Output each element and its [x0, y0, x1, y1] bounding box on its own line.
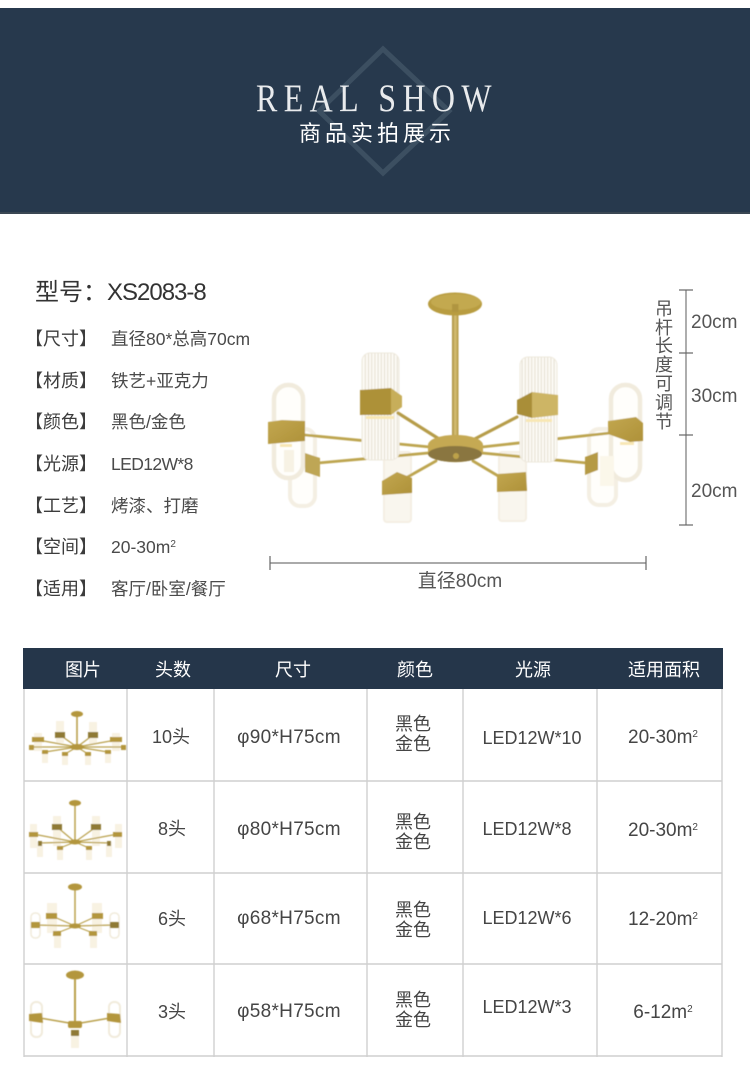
gold lamp holders [268, 388, 643, 495]
spec: finish [25, 496, 198, 516]
row: 6 heads: 金色 [395, 920, 431, 940]
row: 10 heads: 2 [692, 729, 698, 740]
row: 6 heads: 12-20m [628, 909, 692, 930]
row: 6 heads: 黑色 [395, 900, 431, 920]
spec: size: 直径80*总高70cm [111, 329, 250, 349]
spec: suitable rooms [25, 579, 226, 599]
cells: 10头 [152, 727, 190, 747]
label: adjustable rod: 节 [655, 412, 673, 432]
cells: 8头 [158, 819, 186, 839]
label: adjustable rod: 杆 [655, 318, 673, 338]
lamp inner highlights [284, 450, 614, 486]
spec: color: 【颜色】 [25, 412, 97, 432]
table header: 颜色 [397, 660, 433, 680]
row: 10 heads [29, 711, 698, 765]
central hub [428, 435, 483, 462]
spec: space [25, 537, 176, 557]
spec: color: 黑色/金色 [111, 412, 186, 432]
row: 10 heads: LED12W*10 [482, 728, 582, 748]
warm glow under holders [280, 416, 634, 447]
label: 20cm top: 20cm [691, 312, 737, 333]
spec: material: 铁艺+亚克力 [111, 371, 209, 391]
label: adjustable rod: 度 [655, 355, 673, 375]
cells: 3头 [158, 1002, 186, 1022]
label: adjustable rod [655, 299, 673, 432]
spec: space: 【空间】 [25, 537, 97, 557]
row: 8 heads: LED12W*8 [482, 819, 572, 839]
row: 8 heads: 20-30m [628, 820, 692, 841]
row: 8 heads: 金色 [395, 832, 431, 852]
banner: real show [0, 8, 750, 214]
model heading: 型号：XS2083-8 [35, 279, 206, 306]
banner subtitle: 商品实拍展示 [299, 121, 455, 146]
label: diameter 80cm: 直径80cm [418, 570, 502, 592]
row: 3 heads [29, 970, 693, 1048]
spec: light source: LED12W*8 [111, 454, 193, 474]
row: 6 heads: LED12W*6 [482, 908, 572, 928]
icon: diamond outline [319, 49, 449, 173]
row: 10 heads: 黑色 [395, 714, 431, 734]
spec: space: 2 [170, 539, 176, 550]
row: 6 heads [31, 884, 698, 948]
row: 3 heads: φ58*H75cm [237, 1001, 341, 1022]
row: 10 heads: 金色 [395, 734, 431, 754]
spec: light source [25, 454, 193, 474]
row: 6 heads: 2 [692, 911, 698, 922]
label: 30cm: 30cm [691, 386, 737, 407]
spec: color [25, 412, 186, 432]
spec: finish: 【工艺】 [25, 496, 97, 516]
label: adjustable rod: 吊 [655, 299, 673, 319]
spec: suitable rooms: 【适用】 [25, 579, 97, 599]
row: 3 heads: 金色 [395, 1010, 431, 1030]
row: 3 heads: LED12W*3 [482, 997, 572, 1017]
table header: 图片 [65, 660, 101, 680]
upper arms and drop rod [398, 312, 517, 444]
label: adjustable rod: 长 [655, 336, 673, 356]
arms [305, 433, 610, 483]
spec: suitable rooms: 客厅/卧室/餐厅 [111, 579, 226, 599]
table: model comparison [23, 648, 723, 1057]
row: 3 heads: 6-12m [633, 1002, 687, 1023]
thumbnail: 6-head chandelier [31, 884, 119, 948]
label: 20cm bottom: 20cm [691, 481, 737, 502]
thumbnail: 8-head chandelier [29, 800, 122, 860]
canopy [428, 292, 482, 316]
spec: finish: 烤漆、打磨 [111, 496, 198, 516]
thumbnail: 3-head chandelier [29, 970, 121, 1048]
label: adjustable rod: 可 [655, 374, 673, 394]
table header: 头数 [155, 660, 191, 680]
banner title: REAL SHOW [256, 76, 498, 120]
far and lower glass lamps [274, 385, 640, 522]
thumbnail: 10-head chandelier [29, 711, 126, 765]
panel: product specs [25, 279, 250, 599]
spec: size [25, 329, 250, 349]
table header [23, 648, 723, 689]
table header: 适用面积 [628, 660, 700, 680]
table header: 光源 [515, 660, 551, 680]
row: 8 heads [29, 800, 698, 860]
spec: material: 【材质】 [25, 371, 97, 391]
row: 6 heads: φ68*H75cm [237, 908, 341, 929]
cells: 6头 [158, 909, 186, 929]
table header: 尺寸 [275, 660, 311, 680]
dimension: height [655, 290, 737, 525]
row: 3 heads: 黑色 [395, 990, 431, 1010]
spec: space: 20-30m [111, 537, 170, 557]
ribbed mid glass lamps [362, 353, 399, 460]
label: adjustable rod: 调 [655, 393, 673, 413]
row: 8 heads: 2 [692, 822, 698, 833]
spec: size: 【尺寸】 [25, 329, 97, 349]
row: 10 heads: 20-30m [628, 727, 692, 748]
row: 10 heads: φ90*H75cm [237, 727, 341, 748]
row: 3 heads: 2 [687, 1004, 693, 1015]
row: 8 heads: 黑色 [395, 812, 431, 832]
spec: light source: 【光源】 [25, 454, 97, 474]
spec: material [25, 371, 209, 391]
row: 8 heads: φ80*H75cm [237, 819, 341, 840]
main chandelier illustration [268, 292, 643, 522]
